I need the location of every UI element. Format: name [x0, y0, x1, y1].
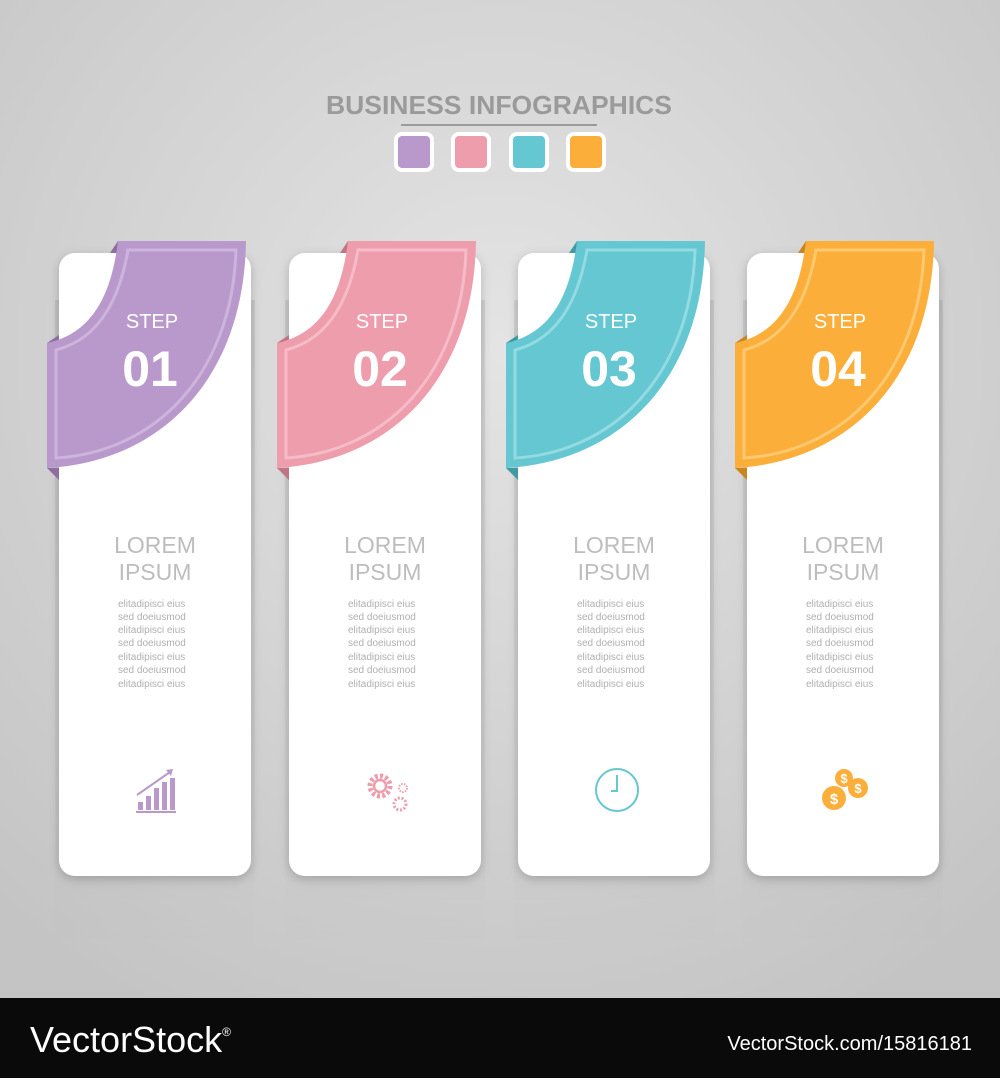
panel: step 03: STEP: [585, 311, 637, 333]
panel: step 02: elitadipisci eius: [348, 679, 415, 690]
panel: step 04: LOREM: [802, 532, 884, 558]
panel: step 04: 04: [810, 341, 866, 397]
panel: step 01: sed doeiusmod: [118, 612, 186, 623]
panel: step 04: sed doeiusmod: [806, 665, 874, 676]
icon: coins: [822, 769, 868, 810]
panel: step 02: 02: [352, 341, 408, 397]
footer bar: VectorStock: [30, 1019, 222, 1060]
icon: gears: [370, 776, 407, 810]
panel: step 04: STEP: [814, 311, 866, 333]
icon: clock: [596, 769, 638, 811]
panel: step 02: STEP: [356, 311, 408, 333]
panel: step 03: LOREM: [573, 532, 655, 558]
panel: step 01: elitadipisci eius: [118, 679, 185, 690]
panel: step 02: sed doeiusmod: [348, 638, 416, 649]
panel: step 01: STEP: [126, 311, 178, 333]
panel: step 03: sed doeiusmod: [577, 612, 645, 623]
panel: step 01: 01: [122, 341, 178, 397]
panel: step 03: elitadipisci eius: [577, 679, 644, 690]
panel: step 01: elitadipisci eius: [118, 625, 185, 636]
panel: step 02: elitadipisci eius: [348, 652, 415, 663]
panel: step 03: elitadipisci eius: [577, 652, 644, 663]
panel: step 03: elitadipisci eius: [577, 625, 644, 636]
panel: step 03: elitadipisci eius: [577, 599, 644, 610]
panel: step 04: elitadipisci eius: [806, 599, 873, 610]
panel: step 04: sed doeiusmod: [806, 638, 874, 649]
panel: step 01: sed doeiusmod: [118, 638, 186, 649]
panel: step 03: IPSUM: [578, 559, 650, 585]
panel: step 01: sed doeiusmod: [118, 665, 186, 676]
icon: coins: $: [830, 791, 839, 808]
icon: bar chart: [136, 769, 176, 813]
panel: step 01: [47, 241, 255, 960]
panel: step 02: elitadipisci eius: [348, 599, 415, 610]
icon: coins: $: [854, 781, 862, 796]
footer bar: ®: [222, 1025, 231, 1039]
panel: step 03: [506, 241, 714, 960]
panel: step 01: IPSUM: [119, 559, 191, 585]
panel: step 04: elitadipisci eius: [806, 652, 873, 663]
panel: step 02: LOREM: [344, 532, 426, 558]
panel: step 04: sed doeiusmod: [806, 612, 874, 623]
panel: step 02: sed doeiusmod: [348, 665, 416, 676]
footer bar: VectorStock.com/15816181: [727, 1033, 972, 1055]
footer bar: [0, 998, 1000, 1078]
panel: step 01: elitadipisci eius: [118, 599, 185, 610]
title: BUSINESS INFOGRAPHICS: [326, 90, 672, 120]
panel: step 01: elitadipisci eius: [118, 652, 185, 663]
panel: step 04: elitadipisci eius: [806, 679, 873, 690]
panel: step 01: LOREM: [114, 532, 196, 558]
panel: step 02: IPSUM: [349, 559, 421, 585]
panel: step 02: elitadipisci eius: [348, 625, 415, 636]
panel: step 02: [277, 241, 485, 960]
color legend squares: [396, 134, 604, 170]
panel: step 03: 03: [581, 341, 637, 397]
icon: coins: $: [840, 771, 848, 786]
panel: step 04: IPSUM: [807, 559, 879, 585]
panel: step 03: sed doeiusmod: [577, 665, 645, 676]
panel: step 02: sed doeiusmod: [348, 612, 416, 623]
panel: step 03: sed doeiusmod: [577, 638, 645, 649]
panel: step 04: elitadipisci eius: [806, 625, 873, 636]
panel: step 04: [735, 241, 943, 960]
